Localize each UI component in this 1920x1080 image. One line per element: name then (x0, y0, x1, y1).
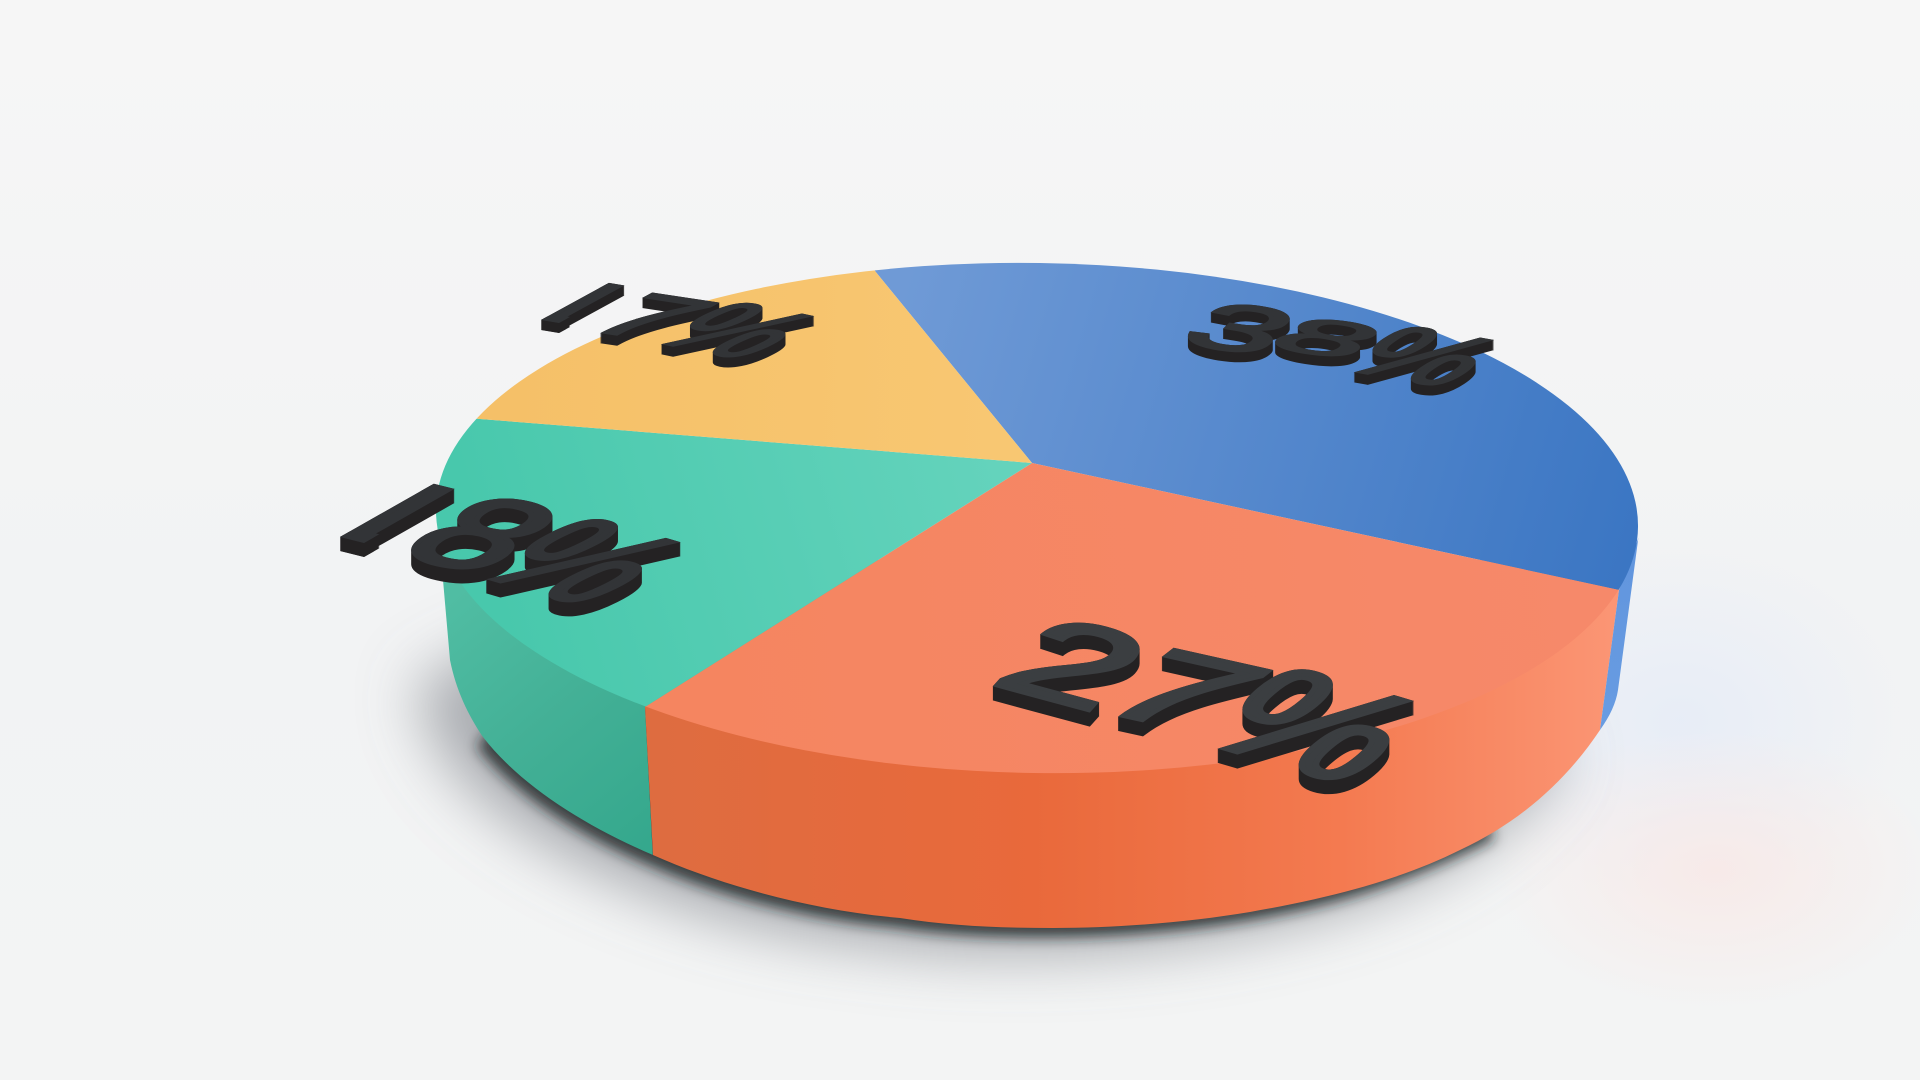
side: orange segment (645, 560, 1625, 960)
side: green segment (438, 529, 653, 855)
label: 38%: % (1316, 311, 1532, 401)
label: 27%: % (1164, 640, 1468, 809)
label: 18%: % (433, 498, 733, 624)
side: blue segment (1600, 538, 1638, 730)
label: 17%: % (619, 288, 856, 372)
pie top face (436, 262, 1638, 774)
label: 27%: 7 (1061, 629, 1303, 753)
slice: yellow 17% (476, 270, 1032, 463)
label: 27% (967, 593, 1468, 809)
3D pie chart scene (340, 262, 1802, 990)
drop shadow under pie (416, 574, 1566, 954)
pie side wall (438, 529, 1638, 928)
label: 38% (1162, 288, 1532, 401)
slice: blue 38% (875, 262, 1638, 590)
slice: orange 27% (646, 463, 1618, 774)
label: 27%: 2 (967, 593, 1179, 735)
label: 38%: 3 (1162, 288, 1318, 369)
label: 17%: 7 (558, 281, 744, 352)
label: 18% (340, 484, 680, 616)
slice: green 18% (436, 418, 1032, 706)
label: 18%: 8 (365, 473, 601, 594)
label: 17% (541, 282, 814, 368)
label: 17%: 1 (490, 267, 665, 338)
label: 18%: 1 (271, 458, 510, 565)
label: 38%: 8 (1249, 306, 1404, 369)
